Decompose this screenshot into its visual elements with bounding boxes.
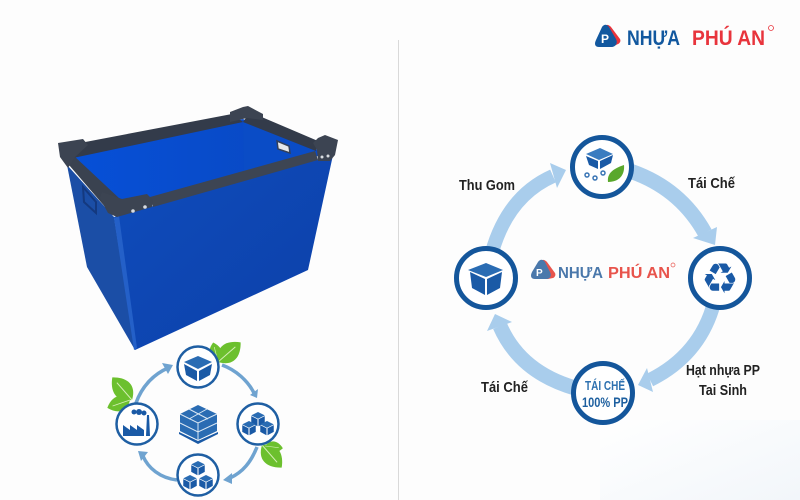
- arrow: cleaning to recycling: [630, 171, 717, 245]
- icon: box: [184, 356, 212, 381]
- center logo: P: [536, 268, 543, 279]
- center badge text: 100% PP: [582, 394, 628, 410]
- cycle circles: [456, 138, 750, 422]
- label: Hạt nhựa PP Tai Sinh: Hạt nhựa PP: [686, 362, 760, 379]
- icon: three cubes: [242, 412, 274, 435]
- center logo: NHỰA: [558, 265, 603, 282]
- center badge text: TÁI CHẾ: [585, 378, 625, 393]
- icon: box with leaf: [585, 148, 624, 182]
- cycle arrows: [487, 163, 717, 392]
- center logo: [531, 260, 675, 282]
- large recycling cycle: [456, 138, 760, 422]
- icon: recycling symbol: ♻: [701, 254, 739, 303]
- logo wordmark: NHỰA: [627, 27, 680, 50]
- arrow: collection to cleaning: [492, 163, 566, 252]
- center badge text: [582, 378, 628, 410]
- icon: pallet of boxes: [179, 405, 218, 444]
- small recycling cycle diagram: [105, 335, 289, 496]
- label: Tái Chế right: Tái Chế: [688, 175, 736, 192]
- arrow: recycling to pellets: [638, 303, 714, 392]
- logo mark: P: [601, 32, 609, 46]
- top right logo: PHÚ AN: [692, 26, 765, 50]
- blue corrugated plastic box: [58, 106, 338, 350]
- label: Thu Gom: Thu Gom: [459, 177, 515, 194]
- leaves: [105, 335, 289, 474]
- arrow: pellets to forming: [487, 314, 575, 388]
- logo mark: [595, 25, 620, 47]
- icon: factory: [123, 409, 150, 436]
- icon: stacked cubes: [183, 461, 213, 489]
- top right logo: [595, 25, 774, 50]
- icon: box: [468, 263, 503, 295]
- label: Hạt nhựa PP Tai Sinh: [686, 362, 760, 399]
- small icon circles: [116, 346, 278, 496]
- center logo: PHÚ AN: [608, 263, 670, 282]
- label: Hạt nhựa PP Tai Sinh: Tai Sinh: [699, 382, 747, 399]
- small cycle arrows: [136, 365, 257, 480]
- label: Tái Chế left: Tái Chế: [481, 379, 529, 396]
